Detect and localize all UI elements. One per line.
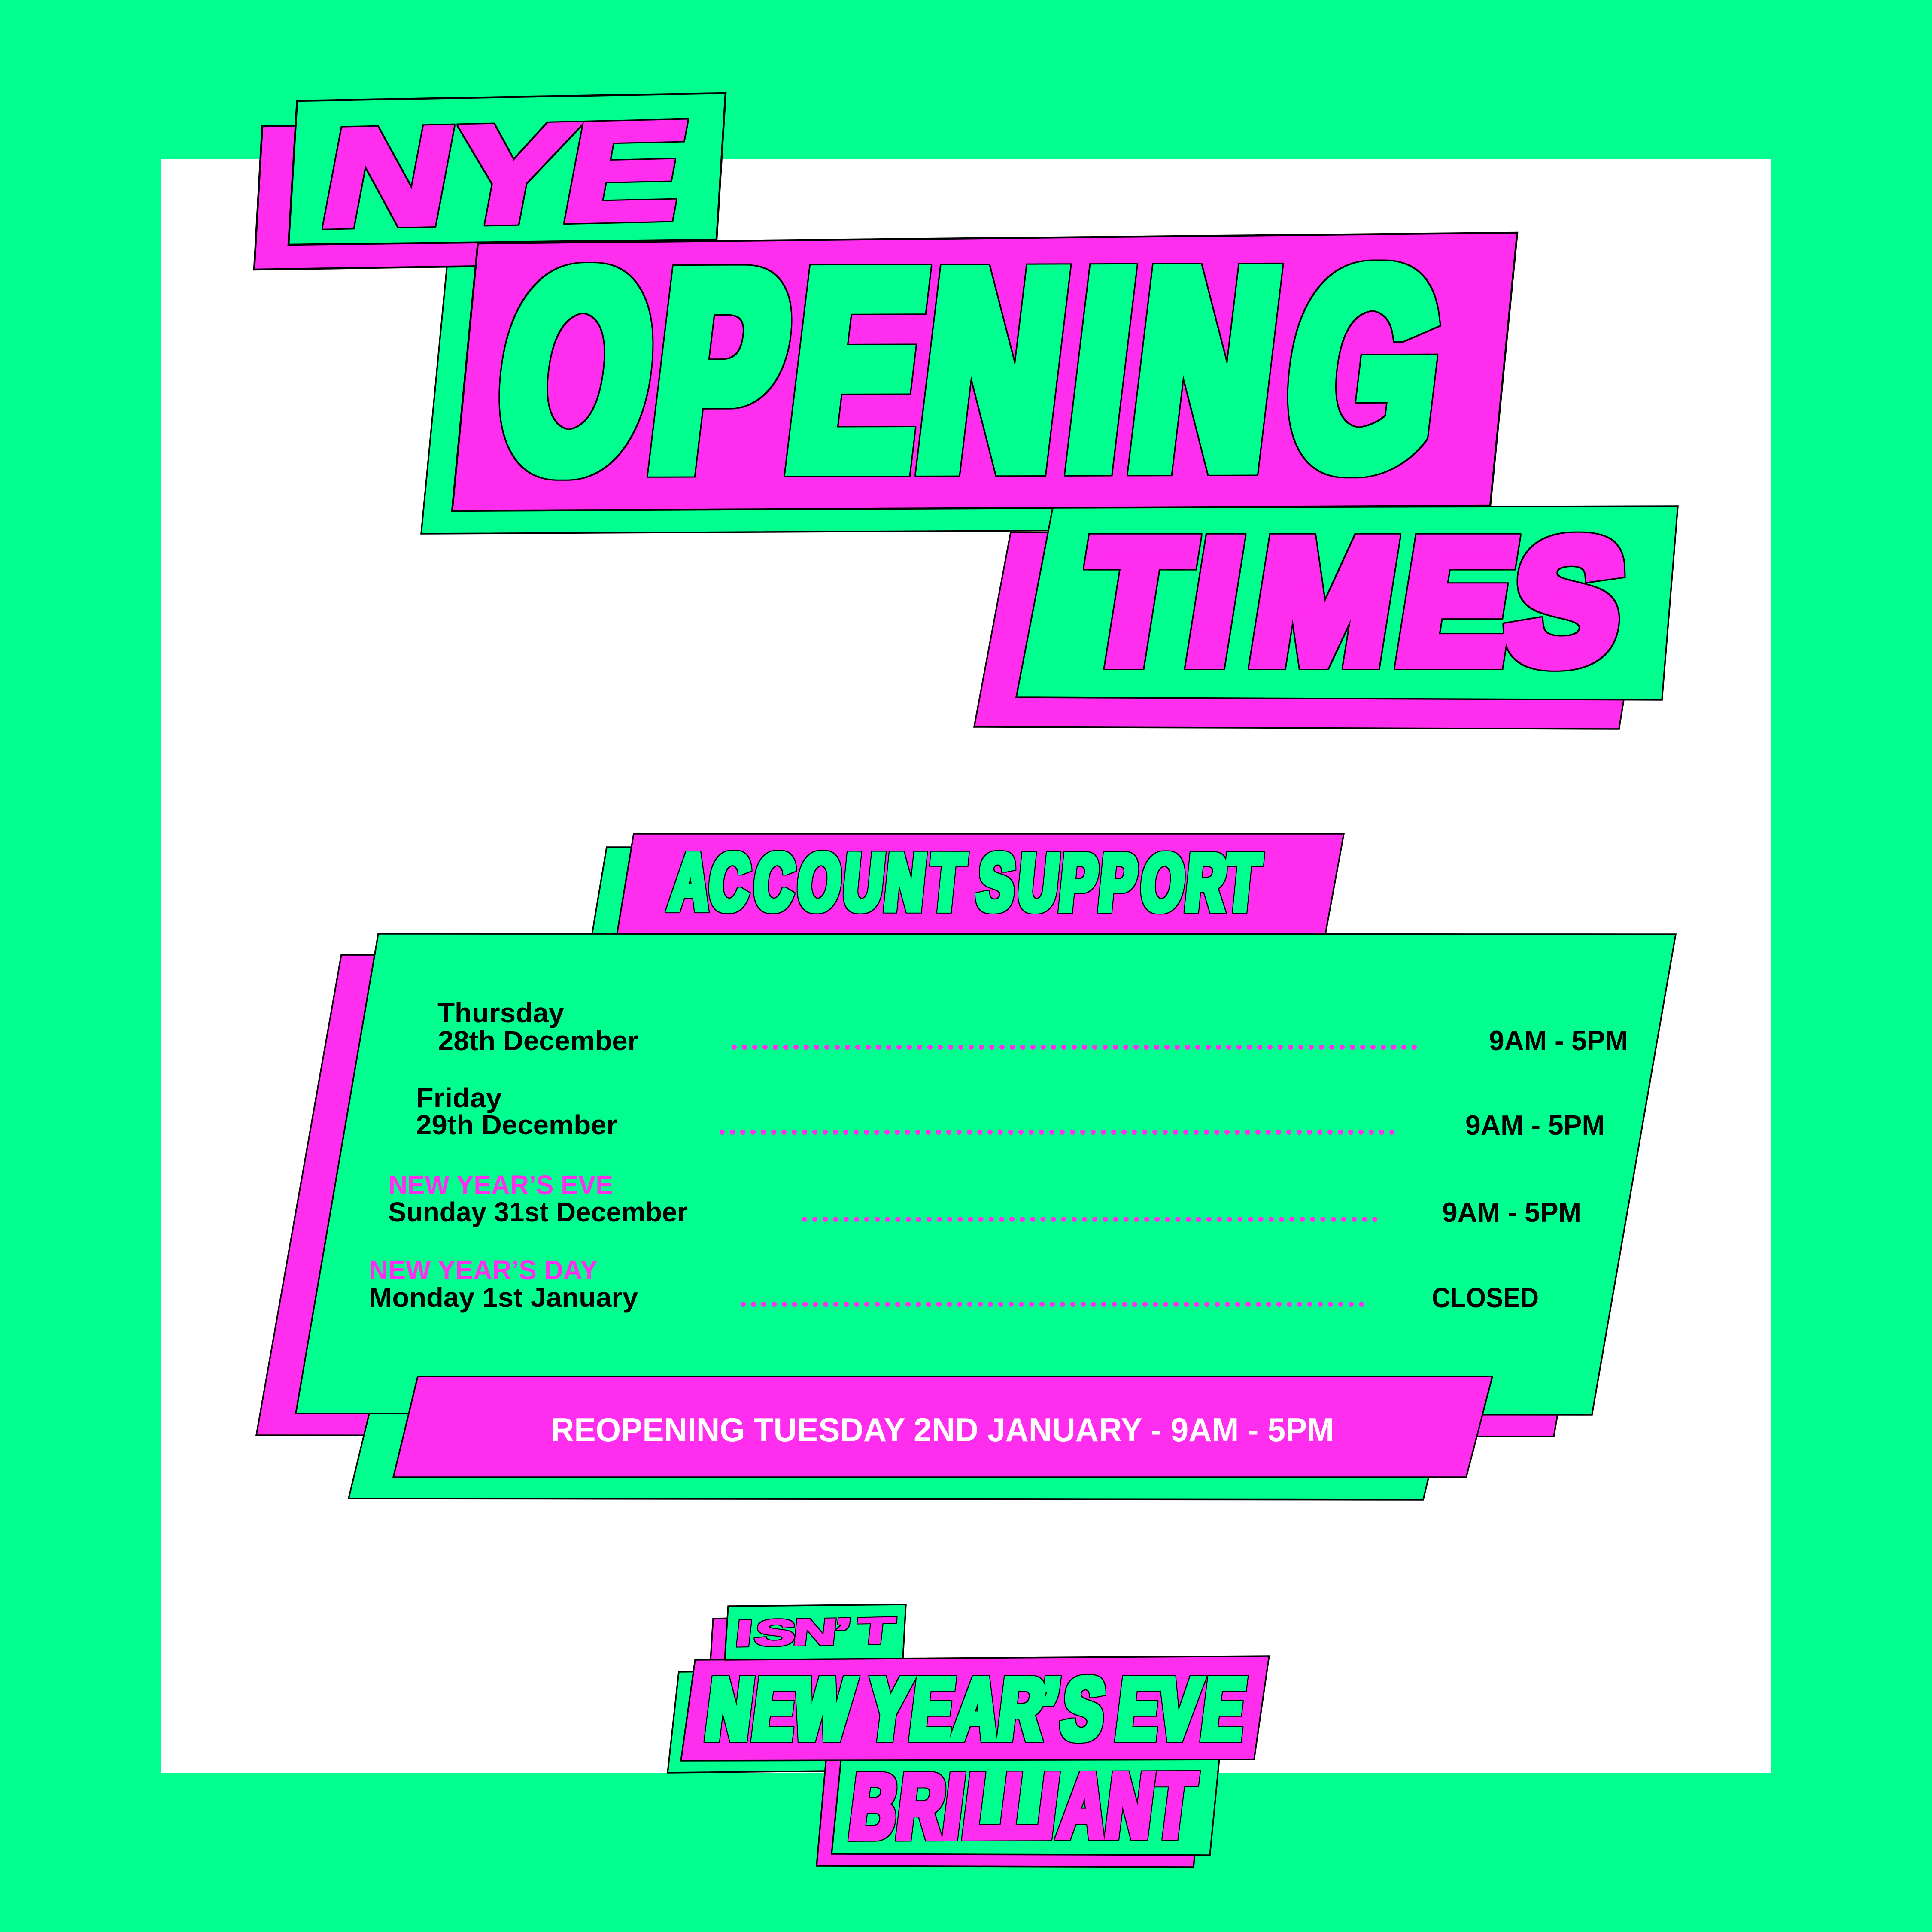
nye panel xyxy=(289,93,726,245)
date label: Monday 1st January xyxy=(369,1282,638,1313)
date label: 29th December xyxy=(416,1109,617,1140)
row: new year's day xyxy=(369,1255,1539,1313)
title lockup xyxy=(254,93,1678,729)
row: thursday 28th december xyxy=(437,997,1628,1056)
times panel xyxy=(1016,506,1678,700)
dotted leader xyxy=(805,1217,1375,1222)
new year's eve shadow panel xyxy=(668,1668,1030,1773)
white central panel xyxy=(161,159,1771,1773)
hours: 9AM - 5PM xyxy=(1465,1109,1605,1141)
hours: 9AM - 5PM xyxy=(1489,1025,1628,1056)
holiday label: NEW YEAR’S EVE xyxy=(389,1170,613,1200)
opening shadow panel xyxy=(421,255,1486,534)
hours: 9AM - 5PM xyxy=(1442,1197,1581,1228)
date label: Sunday 31st December xyxy=(388,1197,688,1227)
slogan lockup xyxy=(668,1604,1269,1867)
reopening banner shadow xyxy=(349,1397,1448,1500)
heading: times: TIMES xyxy=(1069,504,1637,698)
date label: 28th December xyxy=(438,1025,638,1056)
dotted leader xyxy=(743,1302,1362,1307)
text: isn't: ISN’T xyxy=(733,1610,897,1654)
hours panel xyxy=(296,934,1676,1415)
isn't shadow panel xyxy=(711,1615,889,1660)
reopening text: REOPENING TUESDAY 2ND JANUARY - 9AM - 5PM xyxy=(551,1411,1334,1449)
account support tab xyxy=(617,834,1344,934)
new year's eve panel xyxy=(681,1656,1269,1761)
opening panel xyxy=(452,233,1517,511)
text: brilliant: BRILLIANT xyxy=(845,1754,1200,1858)
hours panel shadow xyxy=(256,955,1637,1437)
isn't panel xyxy=(725,1604,906,1660)
dotted leader xyxy=(734,1045,1415,1050)
account support section xyxy=(256,834,1676,1500)
nye shadow panel xyxy=(254,118,691,270)
text: new year's eve: NEW YEAR’S EVE xyxy=(702,1659,1250,1758)
heading: account support: ACCOUNT SUPPORT xyxy=(666,837,1264,928)
row: friday 29th december xyxy=(416,1082,1605,1141)
day label: Thursday xyxy=(437,997,564,1028)
brilliant panel xyxy=(832,1759,1219,1855)
reopening banner xyxy=(393,1376,1492,1477)
heading: nye: NYE xyxy=(310,93,699,255)
holiday label: NEW YEAR’S DAY xyxy=(369,1255,598,1285)
heading: opening: OPENING xyxy=(484,212,1456,528)
times shadow panel xyxy=(974,532,1651,729)
account support shadow tab xyxy=(592,847,1331,934)
row: new year's eve xyxy=(388,1170,1581,1228)
brilliant shadow panel xyxy=(817,1760,1203,1867)
dotted leader xyxy=(722,1130,1392,1135)
day label: Friday xyxy=(416,1082,502,1113)
hours: CLOSED xyxy=(1432,1282,1539,1313)
